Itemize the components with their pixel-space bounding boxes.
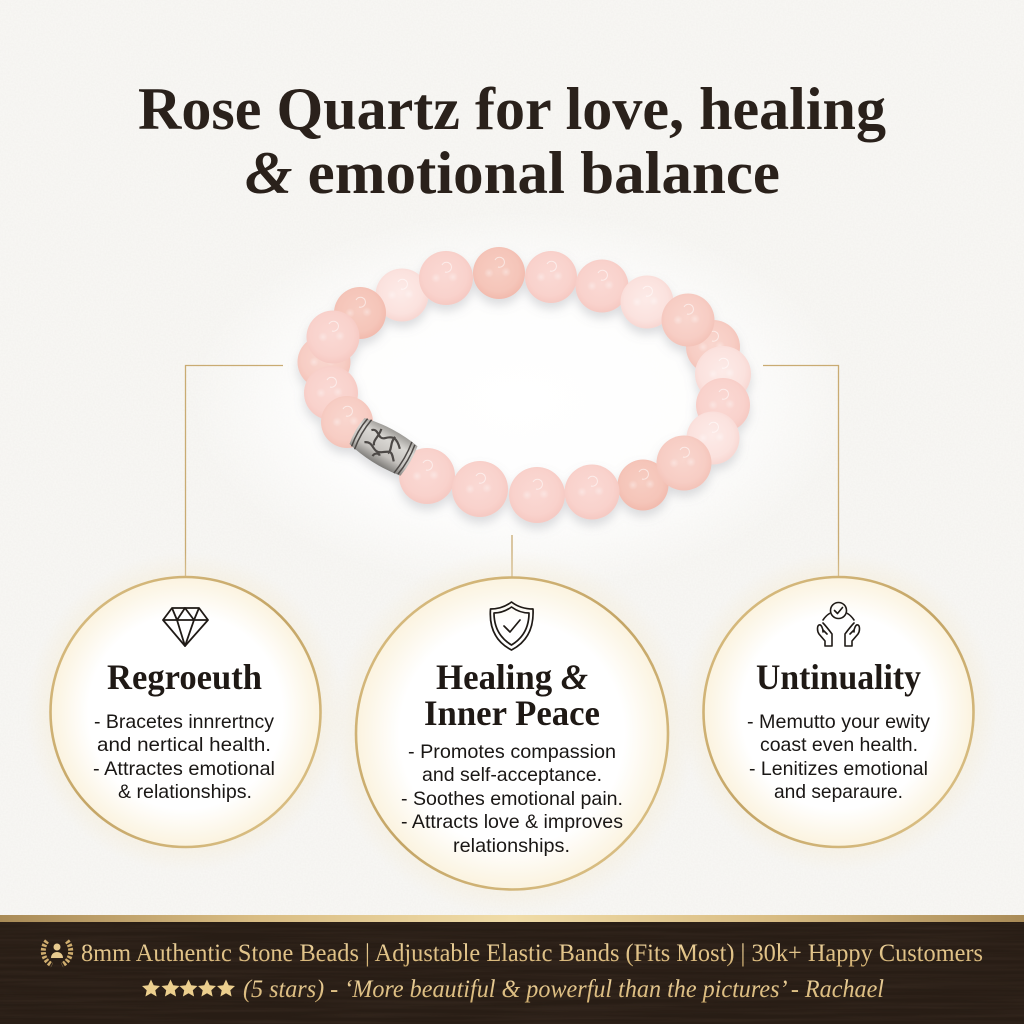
body text: coast even health. [760,734,918,756]
panel: left circle [26,552,346,872]
heading: Regroeuth: Regroeuth [107,657,262,697]
body text: - Bracetes innrertncy [94,711,274,733]
icon: hands and check [818,602,860,646]
heading: Healing & Inner Peace [424,657,600,733]
heading: Healing & Inner Peace: Inner Peace [424,693,600,733]
body text: and nertical health. [97,734,271,756]
silver spacer bead [346,414,420,478]
footer line 1: 8mm Authentic Stone Beads | Adjustable Elastic Bands (Fits Most) | 30k+ Happy Customers [81,940,983,967]
body text: - Attracts love & improves [401,811,623,833]
panel: right circle [678,552,998,872]
body text: - Soothes emotional pain. [401,788,623,810]
icon: diamond [163,608,208,646]
body text: - Memutto your ewity [747,711,930,733]
body text: - Promotes compassion [408,741,616,763]
back beads [298,247,751,464]
panel: middle circle [329,550,695,916]
body text: - Attractes emotional [93,758,275,780]
connector lines [186,366,838,577]
body text: and self-acceptance. [422,764,602,786]
title [138,76,886,206]
heading: Untinuality: Untinuality [756,657,921,697]
body text [93,711,275,803]
footer line 2: (5 stars) - ‘More beautiful & powerful than the pictures’ - Rachael [243,976,884,1003]
body text: & relationships. [118,781,252,803]
body text [401,741,623,857]
heading: Healing & Inner Peace: Healing & [436,657,588,697]
rating stars [142,980,235,996]
title: & emotional balance [245,140,780,206]
footer band [0,915,1024,1024]
icon: shield with check [490,602,533,650]
bracelet [298,247,751,523]
body text: relationships. [453,835,570,857]
body text: and separaure. [774,781,903,803]
title: Rose Quartz for love, healing [138,76,886,142]
front beads [399,436,712,523]
body text: - Lenitizes emotional [749,758,928,780]
body text [747,711,930,803]
icon: laurel with person [43,941,71,965]
